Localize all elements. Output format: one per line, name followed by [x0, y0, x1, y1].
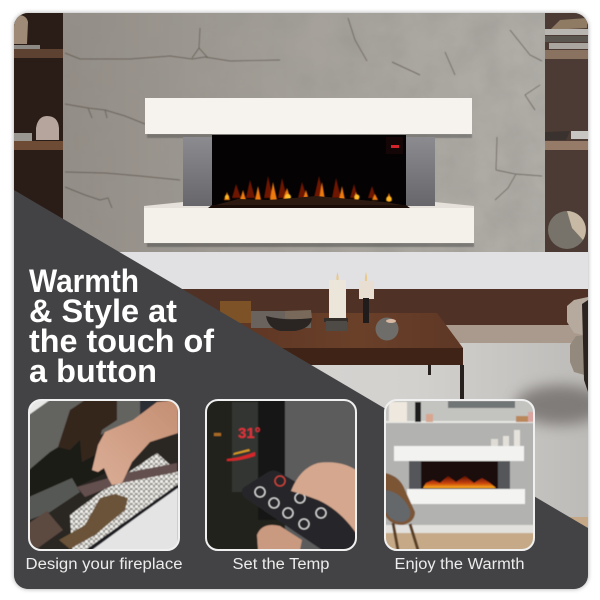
- stone bowl on books: [251, 310, 312, 331]
- title: the touch of: [29, 323, 214, 359]
- floor corner: [570, 517, 588, 528]
- title: Warmth: [29, 263, 139, 299]
- white pebbles: [70, 453, 178, 550]
- white base: [92, 487, 178, 550]
- flame indicator: [227, 452, 255, 461]
- mini mantels: [394, 446, 524, 461]
- log bed: [212, 196, 408, 206]
- large candle: [324, 272, 348, 331]
- log 2: [59, 494, 128, 549]
- round votive: [376, 318, 398, 340]
- small candle: [359, 272, 374, 323]
- right side panel: [406, 137, 435, 206]
- fireplace: [144, 98, 474, 247]
- black frame: [88, 486, 178, 550]
- display readout: 31°: [238, 425, 261, 442]
- flames: [224, 176, 392, 202]
- stone wall: [63, 13, 545, 252]
- thumb under remote: [257, 525, 302, 550]
- dark diagonal panel: [14, 190, 588, 589]
- coffee table: [240, 313, 464, 399]
- log 1: [77, 463, 177, 497]
- wood floor: [385, 533, 534, 550]
- dark log in background: [30, 440, 105, 496]
- remote buttons: [255, 476, 326, 529]
- right shelving: [545, 13, 588, 253]
- floorboards: [446, 325, 583, 343]
- rug: [311, 343, 588, 517]
- top mantel: [145, 98, 472, 134]
- chair: [385, 473, 415, 525]
- hand over remote: [291, 462, 356, 533]
- title: [29, 263, 214, 389]
- skirting: [385, 525, 534, 533]
- amber glass: [220, 301, 251, 323]
- photo: enjoy the warmth: [385, 400, 534, 550]
- caption: design your fireplace: Design your fireplace: [26, 556, 182, 573]
- mini firebox: [421, 461, 498, 489]
- caption: enjoy the warmth: Enjoy the Warmth: [394, 556, 524, 573]
- photo: set the temp: [206, 400, 356, 552]
- photo: design your fireplace: [29, 400, 179, 550]
- rug shadow: [515, 385, 600, 425]
- dark gravel: [29, 478, 80, 520]
- left side panel: [183, 137, 212, 206]
- title: a button: [29, 353, 157, 389]
- mantel candles: [491, 439, 498, 446]
- dark hand: [58, 400, 117, 462]
- caption: set the temp: Set the Temp: [232, 556, 330, 573]
- white band under wall: [120, 252, 588, 289]
- bottom mantel: [144, 202, 474, 243]
- left shelving: [14, 13, 63, 219]
- firebox: [212, 135, 406, 207]
- mantel shadows: [147, 134, 472, 138]
- mini side panels: [409, 461, 421, 489]
- remote: [242, 470, 356, 552]
- light hand: [92, 400, 178, 485]
- title: & Style at: [29, 293, 177, 329]
- temperature display: [386, 137, 403, 154]
- wood wainscot: [182, 289, 588, 325]
- sofa: [567, 297, 588, 392]
- log 3: [29, 511, 63, 550]
